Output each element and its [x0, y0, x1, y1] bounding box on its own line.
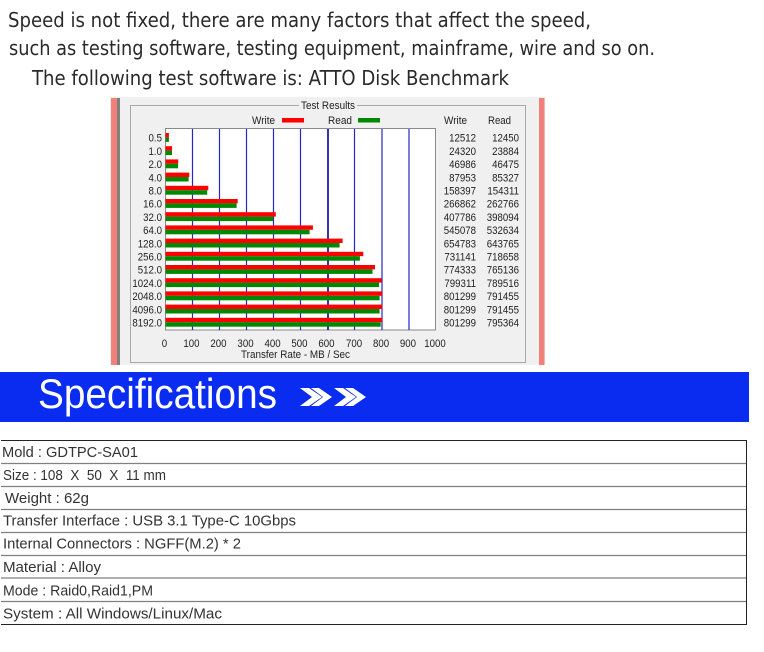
write bars — [166, 133, 382, 322]
read column header: Read — [488, 115, 511, 127]
x axis labels: 200 — [210, 339, 227, 350]
block size labels: 1.0 — [149, 146, 162, 158]
specifications table — [1, 440, 747, 625]
bar chart plot — [166, 128, 436, 330]
read values: 532634 — [487, 226, 519, 237]
read values: 791455 — [487, 305, 519, 316]
write values: 46986 — [449, 160, 476, 171]
banner: specifications — [0, 370, 749, 422]
write values: 158397 — [444, 186, 476, 198]
block size labels: 0.5 — [149, 133, 162, 145]
spec: internal connectors: Internal Connectors : NGFF(M.2) * 2 — [3, 536, 241, 552]
spec: size: Size : 108 X 50 X 11 mm — [3, 467, 166, 484]
x axis labels: 800 — [373, 339, 389, 350]
read values: 262766 — [487, 199, 519, 211]
spec: material: Material : Alloy — [3, 559, 101, 576]
block size labels: 64.0 — [143, 226, 162, 237]
read values: 765136 — [487, 265, 519, 277]
block size labels: 16.0 — [143, 199, 162, 211]
write values: 545078 — [444, 226, 476, 237]
write values: 87953 — [449, 173, 476, 184]
write values — [444, 133, 476, 330]
read values: 795364 — [487, 318, 519, 330]
write values: 774333 — [444, 265, 476, 277]
read values: 718658 — [487, 252, 519, 264]
x axis title: Transfer Rate - MB / Sec — [241, 349, 350, 361]
x axis labels: 300 — [237, 339, 254, 350]
write values: 654783 — [444, 239, 476, 250]
read values: 398094 — [487, 212, 519, 224]
x axis labels: 100 — [183, 339, 200, 350]
legend — [252, 115, 380, 127]
block size labels: 8.0 — [149, 186, 162, 198]
x axis labels: 1000 — [424, 339, 446, 350]
icon: double chevron arrows — [300, 388, 366, 406]
read values: 46475 — [492, 160, 519, 171]
write values: 801299 — [444, 292, 476, 303]
block size labels — [132, 133, 162, 330]
write values: 731141 — [444, 252, 476, 264]
x axis labels — [162, 339, 446, 350]
read values — [487, 133, 519, 330]
spec: mold: Mold : GDTPC-SA01 — [2, 444, 138, 461]
read values: 789516 — [487, 278, 519, 290]
block size labels: 4096.0 — [132, 305, 162, 316]
write values: 407786 — [444, 212, 476, 224]
read values: 154311 — [487, 186, 519, 198]
block size labels: 4.0 — [149, 173, 162, 184]
block size labels: 256.0 — [138, 252, 162, 264]
intro text: such as testing software, testing equipment, mainframe, wire and so on. — [9, 36, 655, 60]
x axis labels: 600 — [318, 339, 335, 350]
write column header: Write — [444, 115, 467, 127]
write values: 12512 — [449, 133, 476, 145]
spec: system: System : All Windows/Linux/Mac — [3, 606, 223, 622]
write values: 266862 — [444, 199, 476, 211]
block size labels: 1024.0 — [132, 278, 162, 290]
intro text: The following test software is: ATTO Disk Benchmark — [31, 66, 509, 90]
write values: 24320 — [449, 146, 476, 158]
block size labels: 2.0 — [149, 160, 162, 171]
read values: 23884 — [492, 146, 519, 158]
block size labels: 128.0 — [138, 239, 162, 250]
x axis labels: 500 — [291, 339, 308, 350]
read values: 643765 — [487, 239, 519, 250]
intro text — [8, 8, 655, 90]
write values: 801299 — [444, 305, 476, 316]
read values: 12450 — [492, 133, 519, 145]
write values: 801299 — [444, 318, 476, 330]
x axis labels: 0 — [162, 339, 167, 350]
block size labels: 32.0 — [143, 212, 162, 224]
x axis labels: 700 — [346, 339, 362, 350]
write values: 799311 — [444, 278, 476, 290]
block size labels: 8192.0 — [132, 318, 162, 330]
read bars — [166, 137, 381, 327]
intro text: Speed is not fixed, there are many factors that affect the speed, — [8, 8, 591, 32]
read values: 85327 — [492, 173, 519, 184]
read values: 791455 — [487, 292, 519, 303]
spec: weight: Weight : 62g — [5, 490, 89, 507]
legend: Write — [252, 115, 275, 127]
panel: ATTO benchmark window — [110, 97, 545, 365]
banner heading: Specifications — [38, 370, 277, 417]
block size labels: 2048.0 — [132, 292, 162, 303]
x axis labels: 400 — [264, 339, 281, 350]
spec: mode: Mode : Raid0,Raid1,PM — [3, 582, 153, 600]
spec: transfer interface: Transfer Interface : USB 3.1 Type-C 10Gbps — [3, 512, 296, 530]
x axis labels: 900 — [400, 339, 416, 350]
chart title: Test Results — [301, 100, 355, 112]
block size labels: 512.0 — [138, 265, 162, 277]
legend: Read — [328, 115, 352, 127]
